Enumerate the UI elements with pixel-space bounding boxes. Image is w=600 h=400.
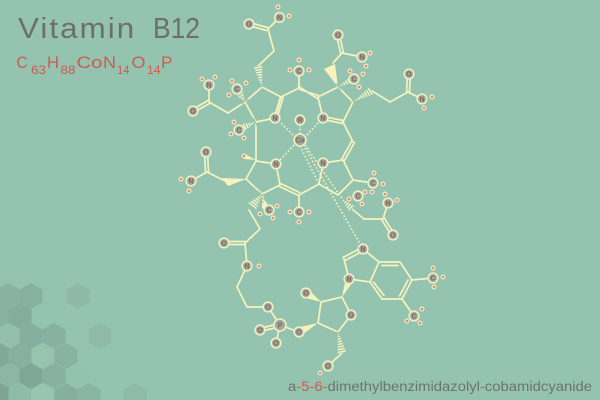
atoms: C xyxy=(355,194,361,200)
hashed wedges xyxy=(237,65,373,354)
atoms: N xyxy=(360,246,366,254)
atoms: O xyxy=(203,150,209,156)
solid wedges xyxy=(222,64,352,335)
atoms: O xyxy=(257,328,263,334)
atoms: C xyxy=(266,208,272,214)
atoms: N xyxy=(320,116,326,122)
atoms: O xyxy=(265,304,271,312)
atoms: N xyxy=(346,276,352,284)
chemical formula: C xyxy=(16,54,28,72)
atoms: N xyxy=(273,162,279,168)
compound name: a-5-6-dimethylbenzimidazolyl -cobamidcyanide xyxy=(288,379,592,394)
atoms: O xyxy=(221,240,227,248)
chemical formula xyxy=(16,54,172,77)
atoms: O xyxy=(390,232,396,240)
molecule structure xyxy=(179,5,445,375)
atoms: P xyxy=(278,322,283,330)
atoms: C xyxy=(236,128,242,134)
atoms: N xyxy=(244,264,250,270)
atoms: C xyxy=(234,86,240,94)
atoms: N xyxy=(320,160,326,168)
atoms: C xyxy=(370,180,376,188)
chemical formula: Co xyxy=(76,54,102,72)
atoms xyxy=(179,5,445,375)
atoms: C xyxy=(430,276,436,282)
coordination dotted bonds xyxy=(280,122,363,249)
atoms: N xyxy=(272,116,278,122)
atoms: N xyxy=(206,82,212,90)
chemical formula: 88 xyxy=(60,65,76,77)
atoms: O xyxy=(348,312,354,320)
atoms: Co xyxy=(295,138,305,144)
atoms: O xyxy=(190,108,196,116)
atoms: N xyxy=(419,96,425,104)
atoms: O xyxy=(246,22,252,28)
title: B12 xyxy=(153,13,200,45)
atoms: C xyxy=(296,210,302,216)
chemical formula: N xyxy=(103,54,116,72)
atoms: O xyxy=(303,290,309,298)
atoms: O xyxy=(406,72,412,78)
chemical formula: 14 xyxy=(147,65,161,77)
atoms: C xyxy=(296,68,302,76)
chemical formula: H xyxy=(47,54,59,72)
chemical formula: 14 xyxy=(117,65,130,77)
atoms: N xyxy=(188,178,194,186)
atoms: N xyxy=(359,54,365,62)
title: Vitamin xyxy=(18,13,136,45)
chemical formula: P xyxy=(161,54,172,72)
atoms: O xyxy=(296,330,302,336)
title xyxy=(18,13,200,45)
chemical formula: 63 xyxy=(31,65,46,77)
chemical formula: O xyxy=(132,54,146,72)
atoms: R xyxy=(297,118,303,124)
atoms: N xyxy=(277,15,282,22)
single and double bonds xyxy=(191,18,433,366)
atoms: O xyxy=(325,364,331,370)
atoms: N xyxy=(385,200,391,208)
atoms: C xyxy=(351,76,357,84)
atoms: O xyxy=(273,340,279,348)
hexagon pattern xyxy=(0,283,147,400)
atoms: C xyxy=(411,314,417,320)
atoms: O xyxy=(335,32,341,40)
